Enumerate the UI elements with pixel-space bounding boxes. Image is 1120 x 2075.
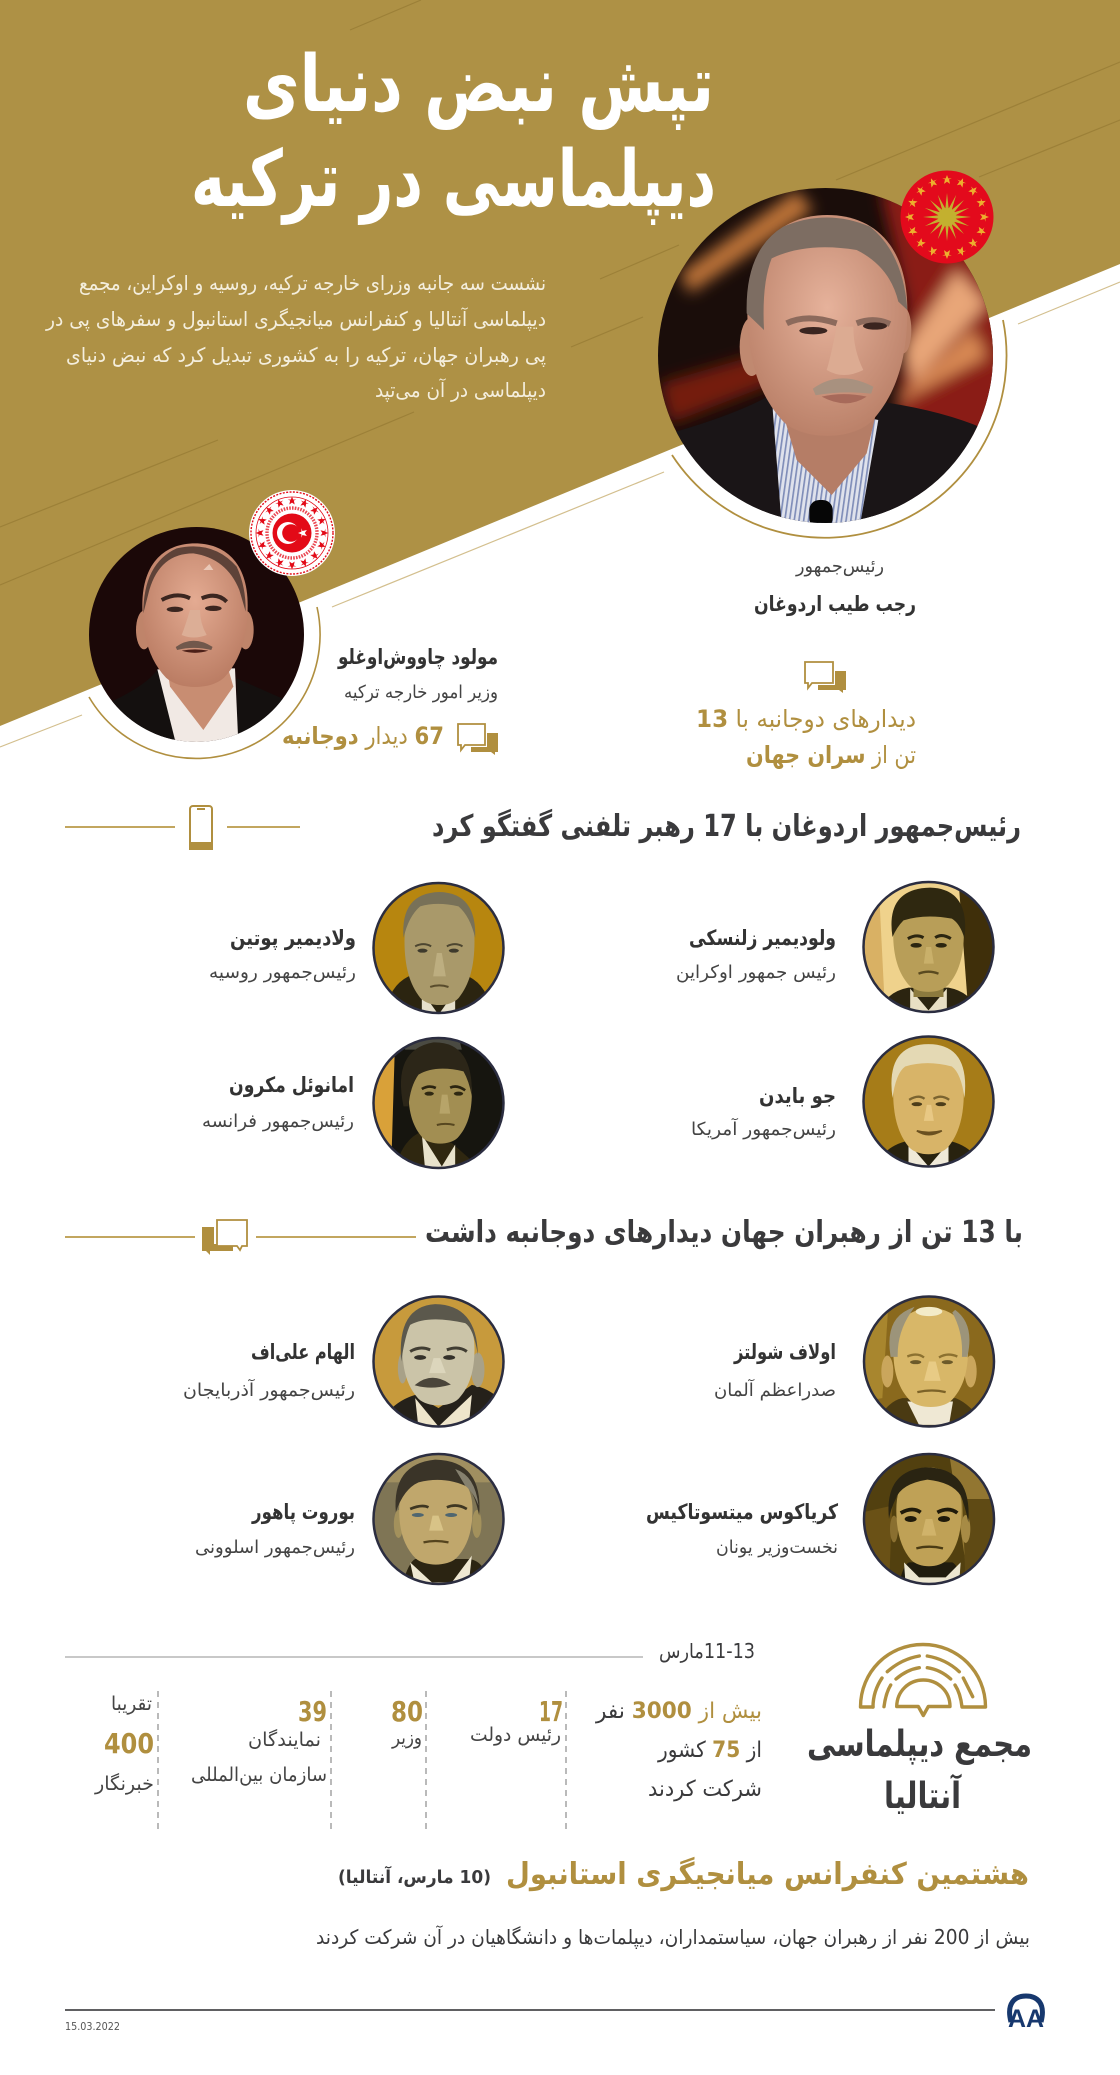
icon: chat bubbles <box>202 1220 247 1255</box>
background diagonal accents <box>0 0 1120 747</box>
person: Macron <box>202 1036 505 1170</box>
title: تپش نبض دنیای <box>243 40 714 130</box>
label: صدراعظم آلمان <box>714 1378 836 1401</box>
label <box>691 1084 836 1140</box>
label <box>183 1340 355 1401</box>
label: امانوئل مکرون <box>229 1073 354 1097</box>
stat: international organisations: سازمان بین‌المللی <box>191 1764 327 1786</box>
footer <box>65 1996 1044 2033</box>
person: Putin <box>209 881 505 1015</box>
forum participation: از 75 کشور <box>657 1738 762 1763</box>
label: رئیس جمهور اوکراین <box>676 962 836 983</box>
emblem: presidency <box>900 170 994 264</box>
person: Scholz <box>714 1295 996 1428</box>
label: رئیس‌جمهور آمریکا <box>691 1117 836 1140</box>
stat: journalists: 400 <box>104 1727 154 1760</box>
Erdogan caption: رجب طیب اردوغان <box>754 592 916 616</box>
stat: ministers: 80 <box>391 1695 423 1728</box>
stat: international organisations: 39 <box>298 1695 327 1728</box>
stat: ministers <box>391 1695 423 1749</box>
stat: heads of state: 17 <box>539 1695 563 1728</box>
label: رئیس‌جمهور اسلوونی <box>195 1537 355 1558</box>
Erdogan bilateral meetings: تن از سران جهان <box>746 741 916 769</box>
label <box>195 1500 355 1558</box>
section heading: phone calls <box>65 806 1021 849</box>
Istanbul mediation conference heading: (10 مارس، آنتالیا) <box>338 1865 491 1888</box>
label: الهام علی‌اف <box>251 1340 355 1364</box>
conference description: بیش از 200 نفر از رهبران جهان، سیاستمداران، دیپلمات‌ها و دانشگاهیان در آن شرکت کردند <box>316 1924 1030 1950</box>
intro paragraph: پی رهبران جهان، ترکیه را به کشوری تبدیل کرد که نبض دنیای <box>66 343 546 368</box>
forum name <box>807 1724 1032 1817</box>
label: کریاکوس میتسوتاکیس <box>646 1500 839 1524</box>
title: دیپلماسی در ترکیه <box>191 135 716 225</box>
intro paragraph <box>45 271 546 403</box>
person: Mitsotakis <box>646 1452 996 1586</box>
Cavusoglu caption <box>337 645 498 703</box>
stat: journalists: تقریبا <box>111 1693 152 1715</box>
stat: heads of state: رئیس دولت <box>470 1724 561 1746</box>
Erdogan bilateral meetings <box>696 705 916 769</box>
label: رئیس‌جمهور روسیه <box>209 962 356 983</box>
person: Pahor <box>195 1452 505 1586</box>
stat: ministers: وزیر <box>391 1727 422 1749</box>
intro paragraph: دیپلماسی آنتالیا و کنفرانس میانجیگری استانبول و سفرهای پی در <box>45 306 546 332</box>
forum participation: بیش از 3000 نفر <box>595 1699 762 1724</box>
label <box>202 1073 354 1132</box>
section heading: bilateral meetings <box>65 1215 1023 1255</box>
person: Zelensky <box>676 880 995 1014</box>
portrait: Erdogan <box>658 170 1008 539</box>
Cavusoglu bilateral meetings: 67 دیدار دوجانبه <box>282 722 444 750</box>
Istanbul mediation conference heading: هشتمین کنفرانس میانجیگری استانبول <box>506 1856 1029 1892</box>
label: جو بایدن <box>759 1084 836 1108</box>
gold header background <box>0 0 1120 726</box>
forum participation <box>595 1699 762 1802</box>
label: اولاف شولتز <box>733 1340 836 1364</box>
label: نخست‌وزیر یونان <box>716 1537 838 1558</box>
section heading: phone calls: رئیس‌جمهور اردوغان با 17 رهبر تلفنی گفتگو کرد <box>432 808 1021 844</box>
stat: heads of state <box>470 1695 563 1746</box>
section heading: bilateral meetings: با 13 تن از رهبران جهان دیدارهای دوجانبه داشت <box>425 1215 1023 1250</box>
icon: chat bubbles <box>805 662 846 693</box>
label <box>714 1340 836 1401</box>
icon: chat bubbles small <box>458 724 498 755</box>
label: رئیس‌جمهور فرانسه <box>202 1111 354 1132</box>
stat: international organisations: نمایندگان <box>248 1728 321 1751</box>
label: ولادیمیر پوتین <box>230 926 356 950</box>
forum name: آنتالیا <box>884 1773 962 1817</box>
label: رئیس‌جمهور آذربایجان <box>183 1378 355 1401</box>
icon: phone <box>190 806 212 849</box>
icon: Antalya forum logo <box>860 1644 986 1716</box>
date rule: 11-13مارس <box>659 1639 755 1663</box>
Istanbul mediation conference heading <box>338 1856 1029 1892</box>
label <box>209 926 356 983</box>
person: Biden <box>691 1035 995 1168</box>
intro paragraph: نشست سه جانبه وزرای خارجه ترکیه، روسیه و اوکراین، مجمع <box>79 271 546 295</box>
stat: journalists: خبرنگار <box>94 1772 154 1795</box>
title <box>191 40 716 225</box>
Erdogan caption <box>754 556 916 616</box>
icon: AA logo: AA <box>1008 2005 1044 2033</box>
stat: international organisations <box>191 1695 327 1786</box>
emblem: foreign ministry <box>249 490 335 576</box>
person: Aliyev <box>183 1295 505 1428</box>
Cavusoglu caption: وزیر امور خارجه ترکیه <box>344 682 498 703</box>
Erdogan bilateral meetings: دیدارهای دوجانبه با 13 <box>696 705 916 733</box>
label: ولودیمیر زلنسکی <box>689 926 836 950</box>
footer: 15.03.2022 <box>65 2020 120 2033</box>
portrait: Cavusoglu <box>80 490 340 770</box>
forum participation: شرکت کردند <box>648 1777 762 1802</box>
intro paragraph: دیپلماسی در آن می‌تپد <box>375 377 546 403</box>
forum name: مجمع دیپلماسی <box>807 1724 1032 1765</box>
Cavusoglu caption: مولود چاووش‌اوغلو <box>337 645 498 669</box>
Erdogan caption: رئیس‌جمهور <box>795 556 884 577</box>
label <box>676 926 836 983</box>
label <box>646 1500 839 1558</box>
stat: journalists <box>94 1693 154 1795</box>
label: بوروت پاهور <box>251 1500 355 1524</box>
forum stats <box>94 1691 566 1830</box>
